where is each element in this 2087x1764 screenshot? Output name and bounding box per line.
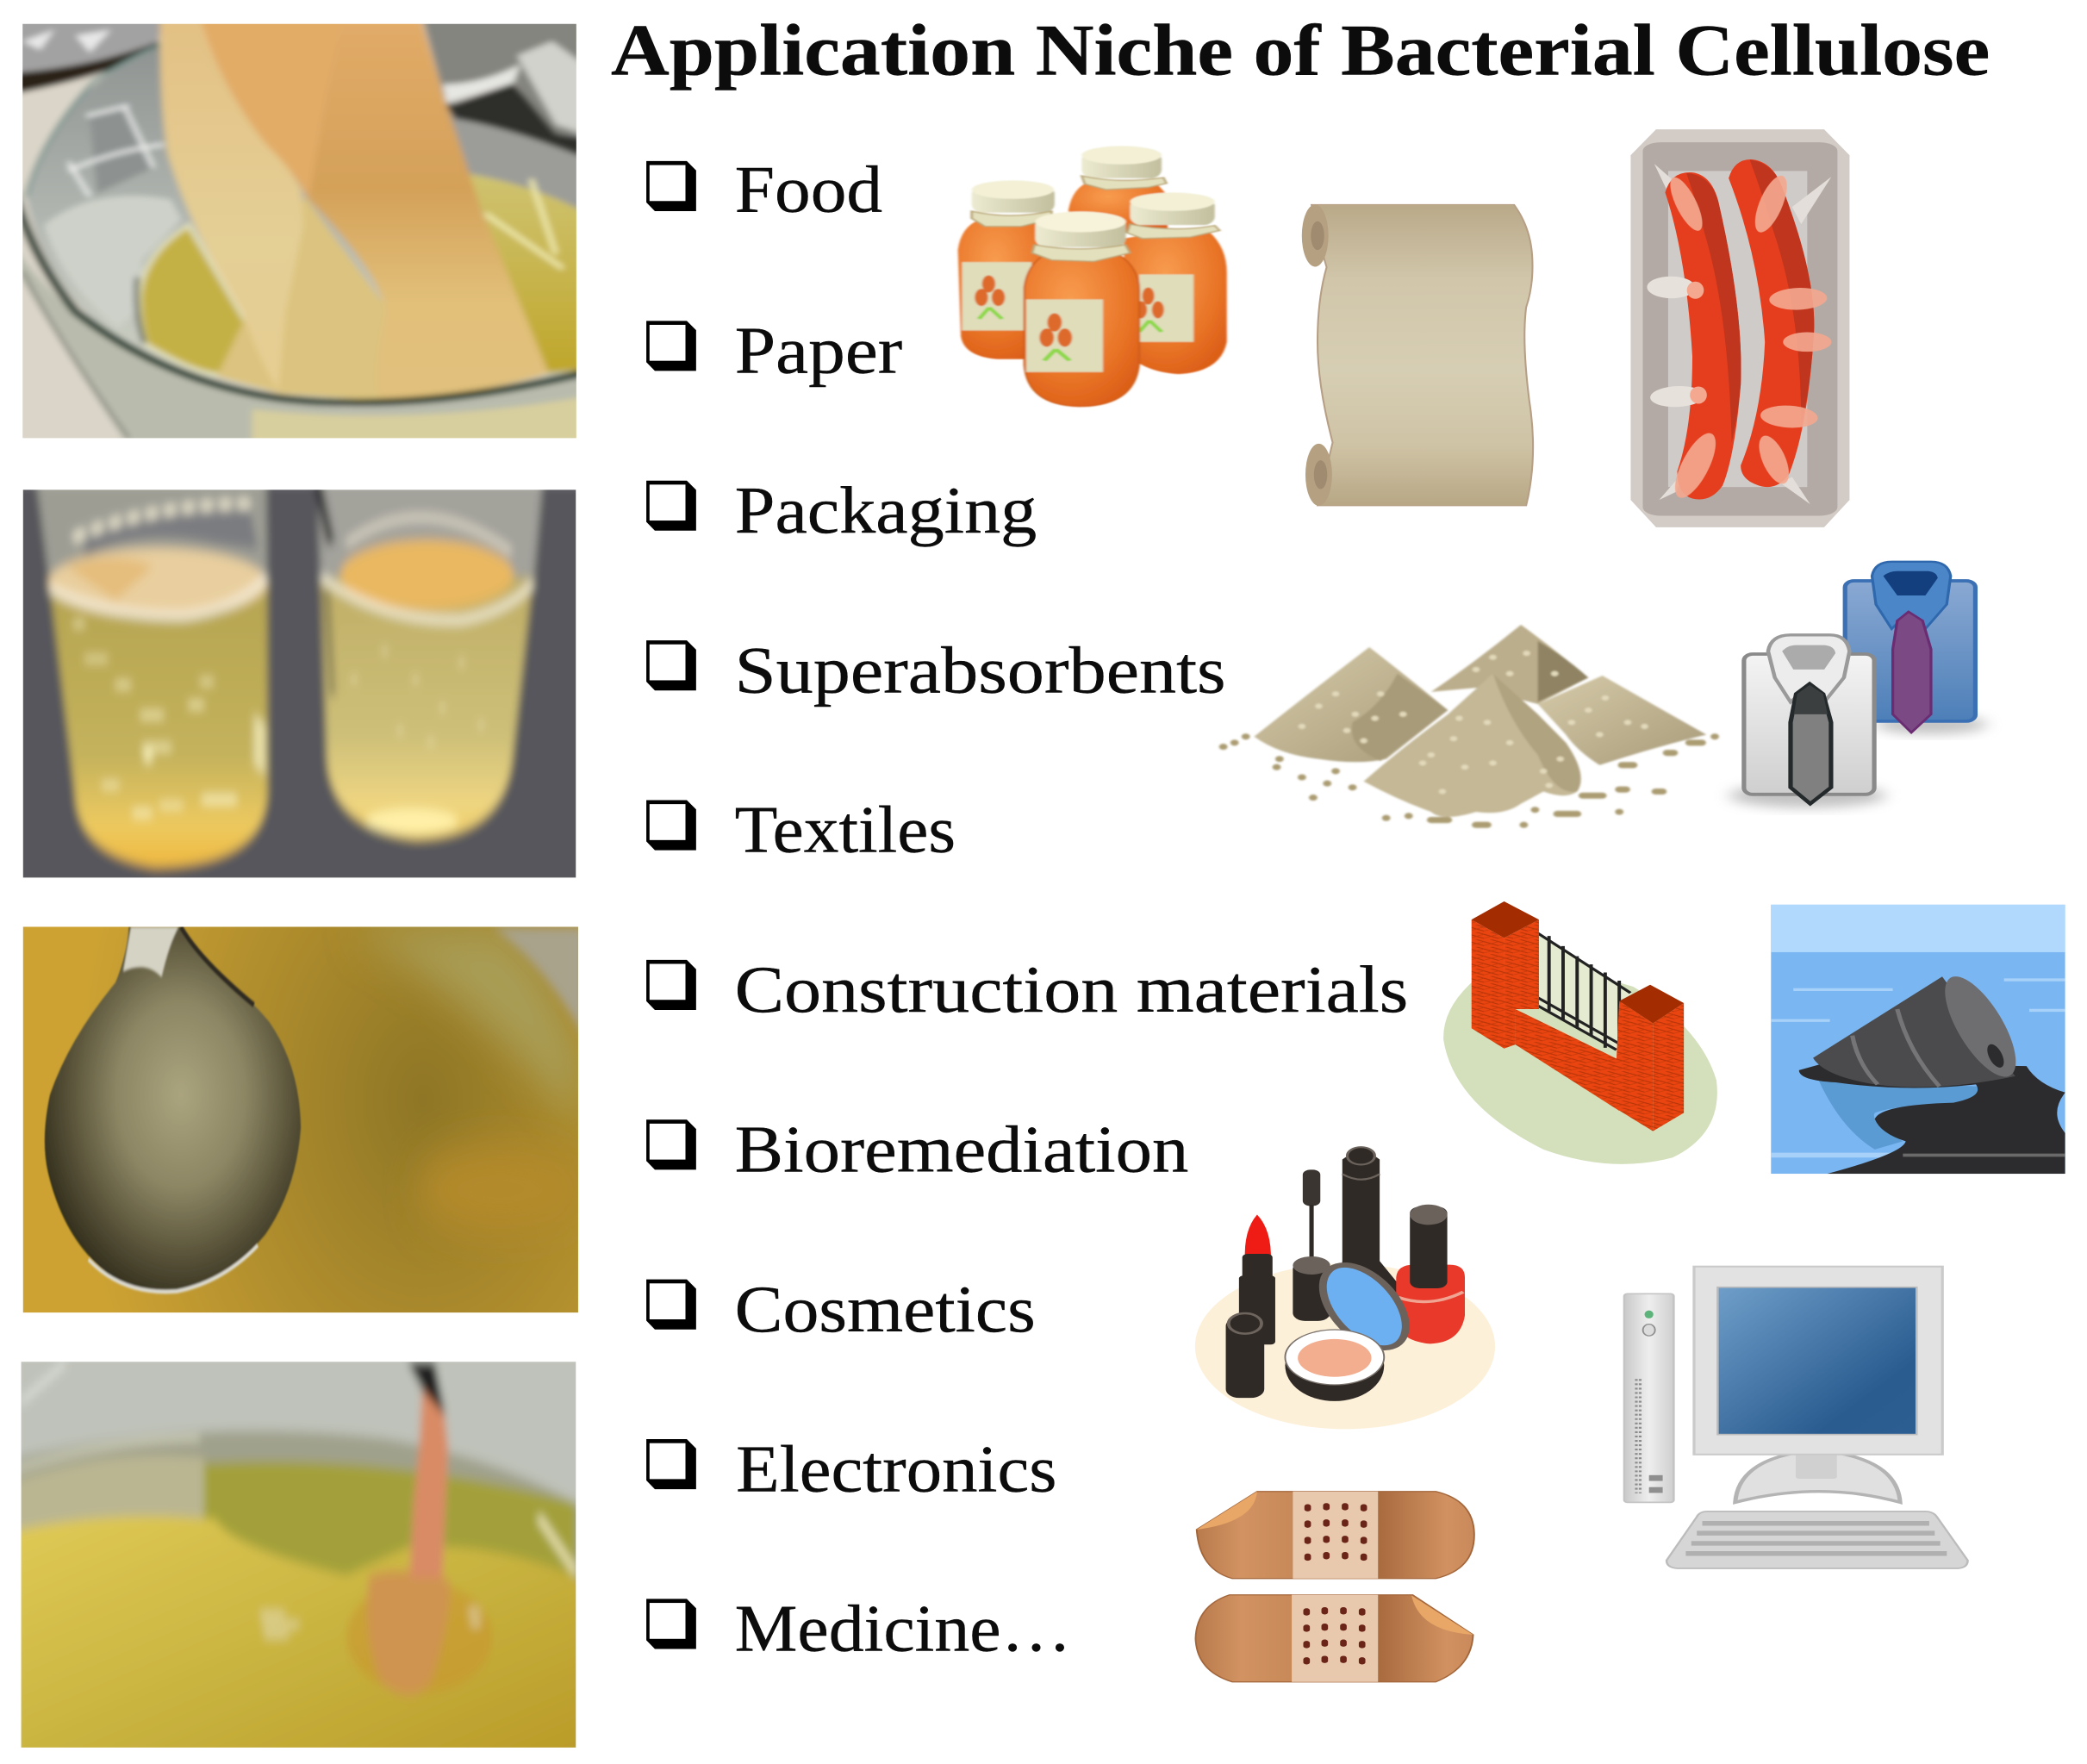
monitor stand [1735, 1454, 1900, 1502]
photo: two culture tubes [16, 481, 585, 889]
icon: jam jars (food) [958, 146, 1227, 407]
list item: Packaging: Packaging [735, 473, 1037, 547]
icon: desktop computer (electronics) [1624, 1267, 1968, 1568]
keyboard [1666, 1512, 1968, 1568]
list item: Construction materials: Construction materials [735, 952, 1408, 1026]
photo: spoon over yellow culture [16, 916, 585, 1324]
icon: adhesive bandages (medicine) [1195, 1492, 1474, 1682]
list item: Electronics: Electronics [736, 1431, 1056, 1505]
bandage bottom [1195, 1595, 1473, 1682]
list item: Food [646, 153, 882, 227]
list item: Paper: Paper [735, 314, 903, 388]
icon: paper scroll [1302, 204, 1533, 506]
list item: Textiles [646, 793, 956, 867]
icon: cosmetics set [1195, 1147, 1495, 1429]
list item: Superabsorbents: Superabsorbents [735, 633, 1226, 707]
computer tower [1624, 1293, 1673, 1502]
icon: pile of sand (superabsorbents) [1224, 625, 1715, 825]
monitor neck [1796, 1454, 1837, 1479]
icon: sausages in tray (packaging) [1630, 129, 1849, 527]
photo: pellicle on forceps over petri dish [16, 1352, 585, 1760]
list item: Cosmetics: Cosmetics [735, 1272, 1036, 1346]
list item: Paper [646, 314, 903, 388]
list item: Textiles: Textiles [735, 793, 956, 867]
list item: Medicine: Medicine… [735, 1592, 1071, 1666]
photo: cellulose sheet lifted from bowl [12, 16, 588, 446]
bandage top [1197, 1492, 1474, 1579]
monitor [1694, 1267, 1942, 1455]
icon: spilled oil barrel (bioremediation) [1771, 905, 2065, 1174]
title: Application Niche of Bacterial Cellulose [611, 10, 1990, 91]
icon: brick wall and gate (construction) [1443, 901, 1717, 1164]
list item: Food: Food [735, 153, 882, 227]
list item: Bioremediation: Bioremediation [735, 1113, 1188, 1187]
icon: shirts and ties (textiles) [1729, 562, 1987, 807]
